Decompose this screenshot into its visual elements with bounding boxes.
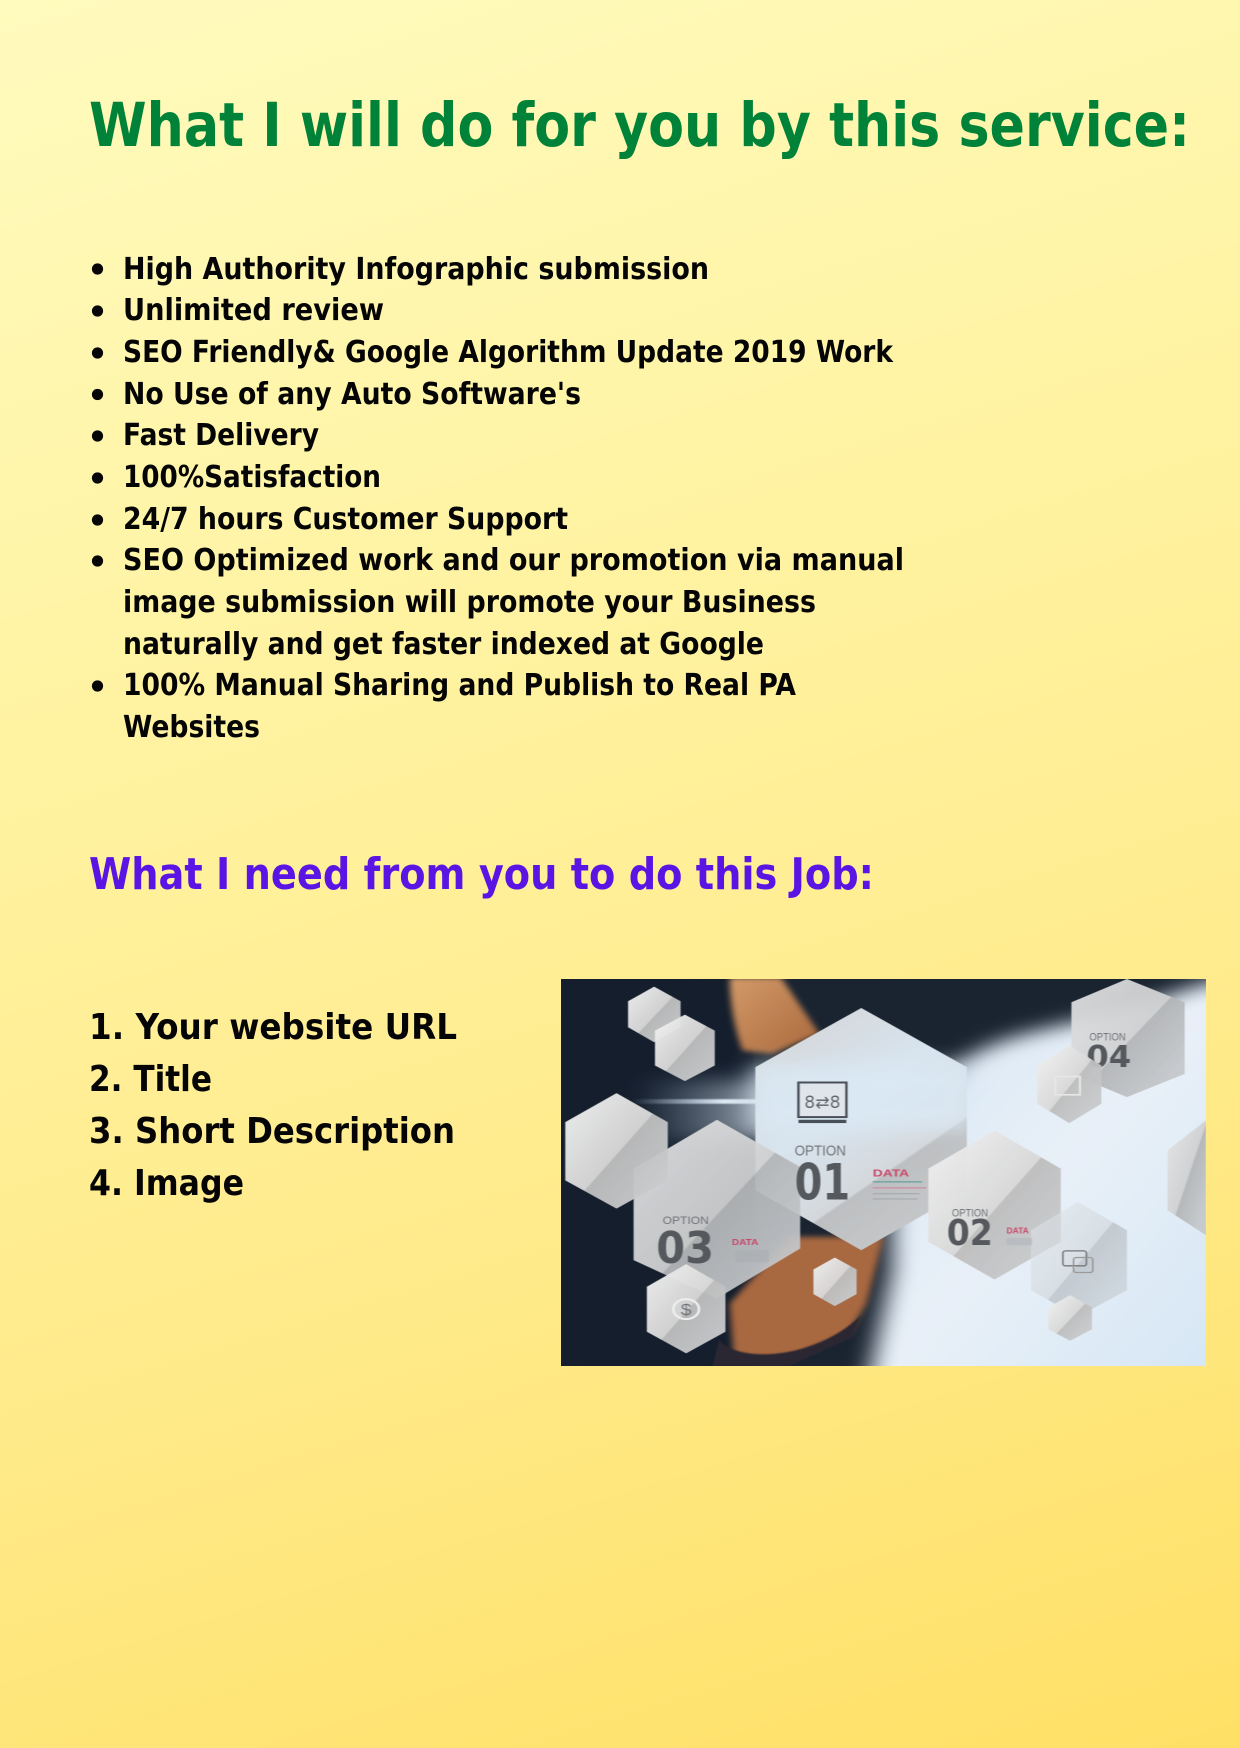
bullet item 2: Unlimited review [123,293,384,328]
hexagon dollar [647,1264,725,1353]
bullet item 4: No Use of any Auto Software's [123,377,581,412]
option 03 text [656,1214,769,1273]
shirt and cloud [866,977,1234,1390]
option 03 text: OPTION [663,1214,709,1227]
option 01 text: 01 [795,1154,850,1212]
item 1: 1. Your website URL [89,1007,457,1048]
subheading: What I need from you to do this Job: [89,849,874,900]
item 2: 2. Title [89,1059,212,1100]
option 02 text [947,1207,1032,1254]
bullet item 9 [92,668,797,745]
bullet item 9: Websites [123,710,260,745]
hexagon dollar: $ [681,1301,692,1319]
small hexagon bottom right [1048,1295,1092,1341]
option 02 text: 02 [947,1212,993,1254]
option 04 text: OPTION [1089,1031,1126,1043]
photo: hand touching glass hexagon options [561,979,1206,1366]
option 03 text: 03 [656,1222,714,1273]
sleeve cuff [713,1315,861,1366]
icon: B2B monitor: 8⇄8 [804,1092,841,1112]
option 04 text: 04 [1086,1039,1131,1075]
hexagon 01 light glow [751,1064,973,1130]
hexagon chart [1037,1046,1101,1123]
bullet item 8: naturally and get faster indexed at Google [123,627,764,662]
bullet item 5: Fast Delivery [123,418,319,453]
option 01 text: OPTION [795,1142,846,1159]
hexagon 01 [755,1008,967,1250]
hexagon 04 [1071,979,1185,1097]
icon: B2B monitor [798,1082,846,1123]
bullet item 3: SEO Friendly& Google Algorithm Update 2019 Work [123,335,894,370]
hexagons top left [628,987,715,1081]
bullet item 8: SEO Optimized work and our promotion via manual [123,543,904,578]
hexagon right edge [1168,1120,1206,1235]
small hexagon center [813,1258,857,1306]
bullet item 8: image submission will promote your Business [123,585,816,620]
option 01 text: DATA [873,1169,909,1179]
option 02 text: OPTION [952,1207,988,1219]
hexagon 02 [928,1130,1061,1279]
numbered list: requirements [89,1007,457,1204]
hand [730,977,884,1362]
hexagon 03 [634,1120,800,1298]
option 02 text: DATA [1007,1227,1029,1235]
bullet item 6: 100%Satisfaction [123,460,381,495]
option 04 text [1086,1031,1131,1075]
hexagon speech icon [1031,1202,1127,1317]
bullet item 9: 100% Manual Sharing and Publish to Real PA [123,668,797,703]
bullet item 1: High Authority Infographic submission [123,252,709,287]
item 3: 3. Short Description [89,1111,455,1152]
bullet item 7: 24/7 hours Customer Support [123,502,568,537]
option 03 text: DATA [732,1238,758,1248]
item 4: 4. Image [89,1163,244,1204]
hexagon left [565,1093,668,1209]
option 01 text [795,1142,926,1212]
bullet item 8 [92,543,904,662]
bulleted list: service features [92,252,904,745]
glow streak [631,1080,969,1140]
